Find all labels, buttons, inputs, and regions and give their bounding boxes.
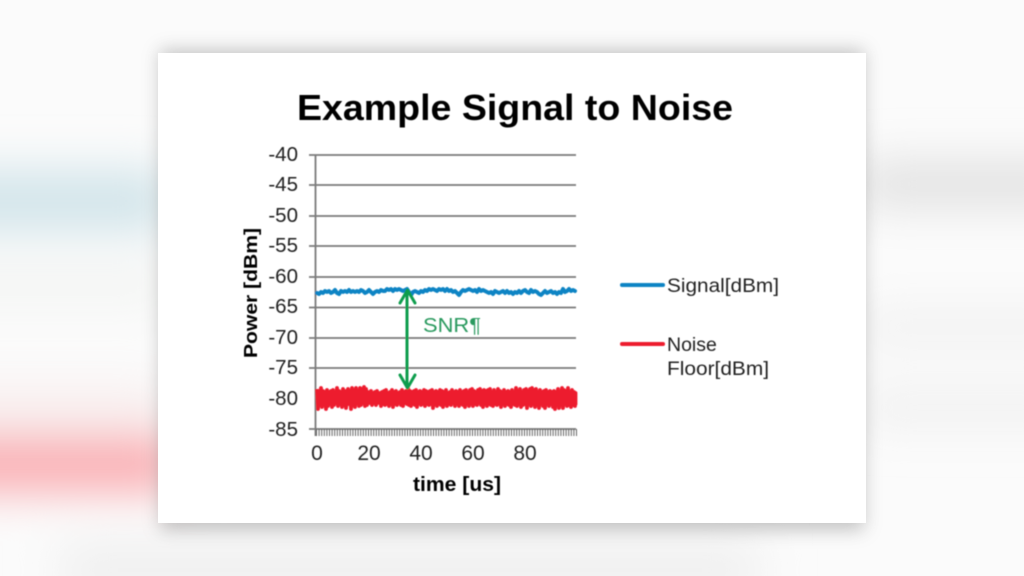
y axis title: Power [dBm] — [240, 228, 261, 358]
x axis tick labels: 60 — [461, 442, 485, 465]
x axis tick labels — [311, 442, 537, 465]
title: Example Signal to Noise — [297, 87, 733, 128]
y axis tick labels — [268, 143, 298, 441]
legend: signal: Signal[dBm] — [667, 275, 779, 297]
x axis title: time [us] — [413, 473, 501, 496]
signal series — [317, 289, 575, 295]
SNR label: SNR¶ — [423, 314, 481, 337]
x axis tick labels: 80 — [513, 442, 537, 465]
y axis tick labels: -55 — [268, 234, 298, 257]
y axis tick labels: -75 — [268, 356, 298, 379]
y axis tick labels: -80 — [268, 387, 298, 410]
y axis tick labels: -45 — [268, 173, 298, 196]
y axis tick labels: -65 — [268, 295, 298, 318]
x axis tick labels: 0 — [311, 442, 323, 465]
legend: noise floor: Floor[dBm] — [667, 358, 769, 380]
y axis tick labels: -40 — [268, 143, 298, 166]
SNR arrow — [400, 290, 415, 388]
x axis tick labels: 40 — [409, 442, 433, 465]
y axis tick labels: -85 — [268, 418, 298, 441]
chart content — [240, 87, 779, 496]
chart grid and axes — [309, 155, 577, 436]
y axis tick labels: -50 — [268, 204, 298, 227]
y axis tick labels: -70 — [268, 326, 298, 349]
y axis tick labels: -60 — [268, 265, 298, 288]
panel: white chart card — [158, 53, 866, 523]
noise floor series — [317, 387, 576, 409]
legend: noise floor — [622, 334, 769, 380]
x axis tick labels: 20 — [357, 442, 381, 465]
legend: noise floor: Noise — [667, 334, 717, 356]
